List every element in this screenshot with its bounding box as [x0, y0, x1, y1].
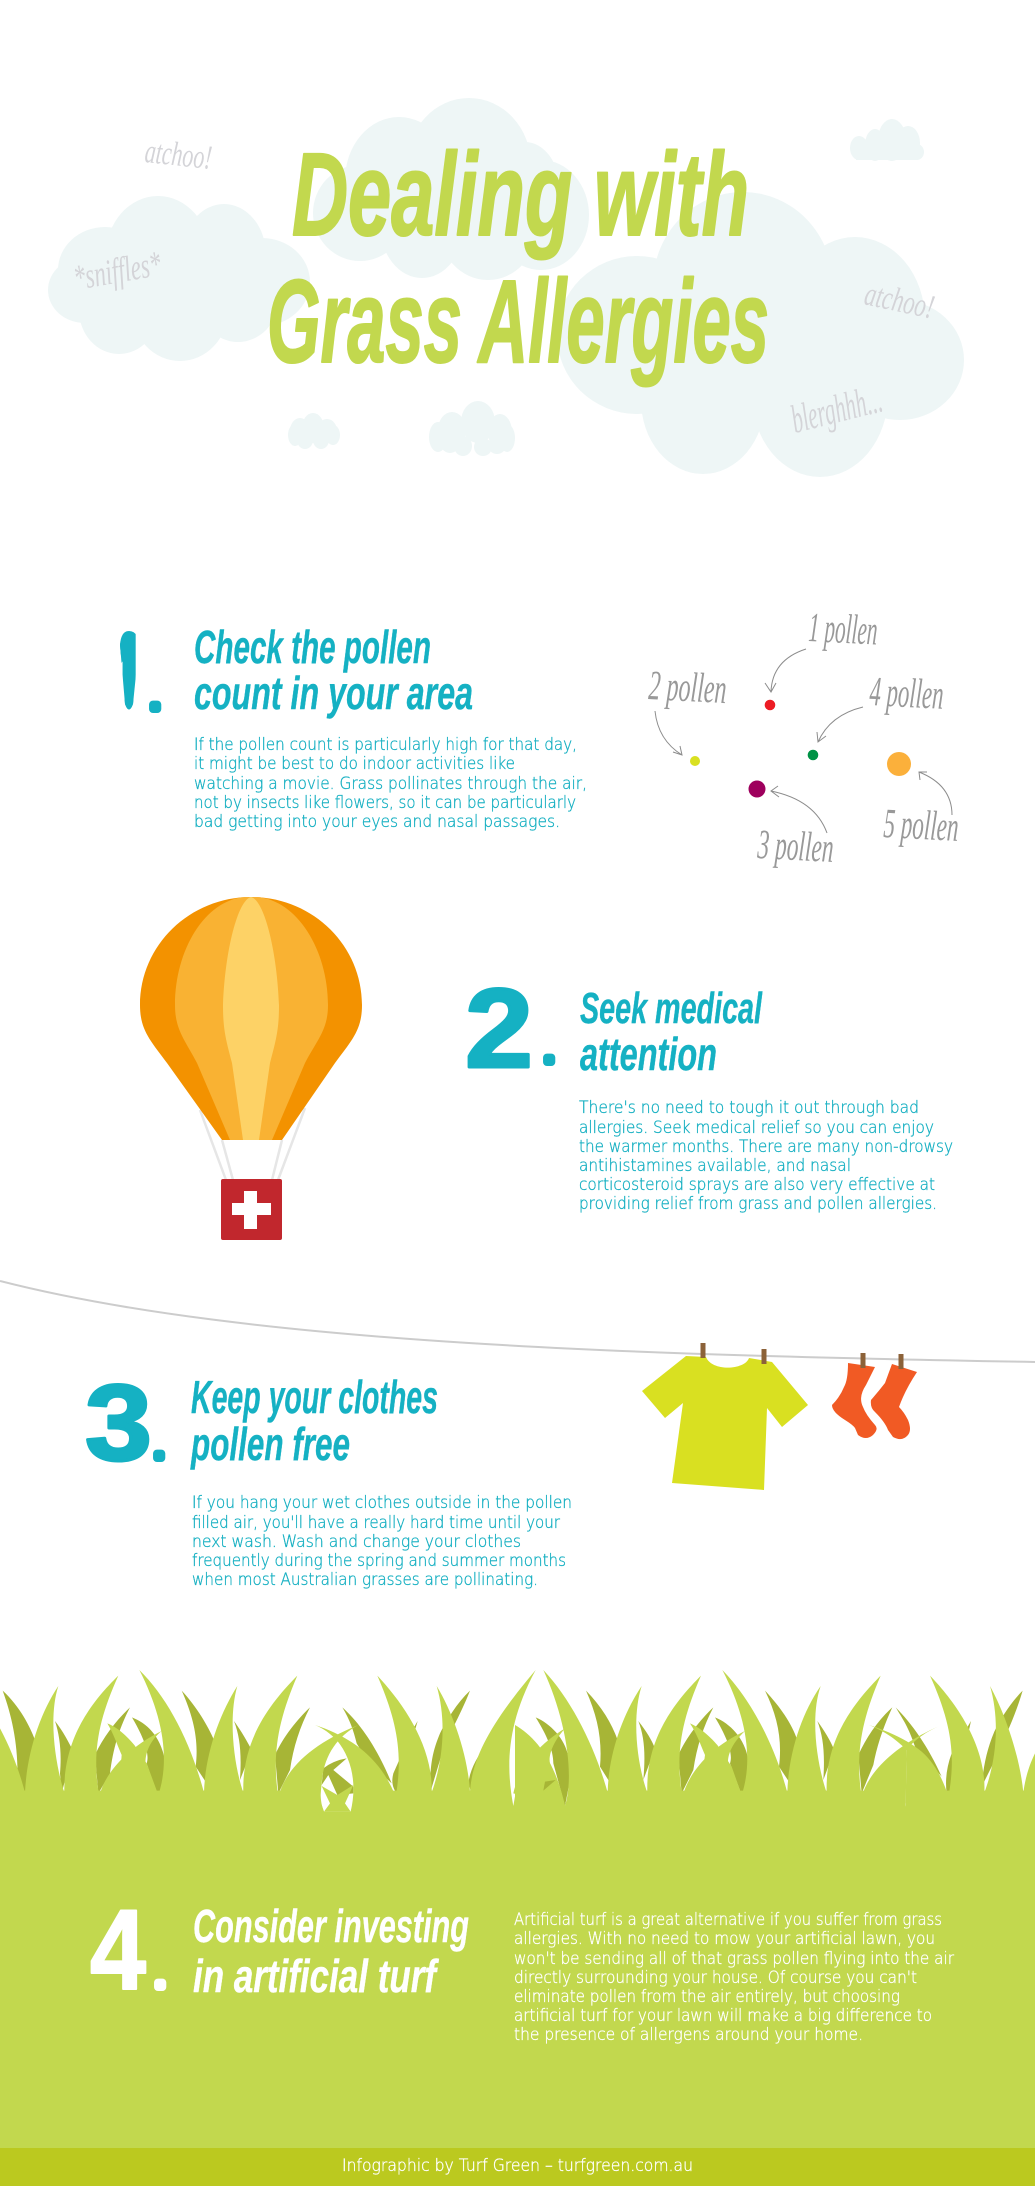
heading step 3: pollen free — [190, 1418, 350, 1470]
body text step 2: There's no need to tough it out through bad — [579, 1098, 919, 1118]
label: 2 pollen: 2 pollen — [647, 663, 728, 713]
body text step 1: watching a movie. Grass pollinates through the air, — [194, 774, 587, 794]
handwritten: sniffles: *sniffles* — [70, 243, 164, 298]
body text step 2: antihistamines available, and nasal — [579, 1156, 851, 1176]
heading step 4 — [193, 1900, 469, 2002]
heading step 3 — [190, 1371, 438, 1470]
number 3: 3 — [85, 1362, 152, 1483]
body text step 1: not by insects like flowers, so it can be particularly — [194, 793, 576, 813]
heading step 2: Seek medical — [580, 984, 762, 1033]
icon: clothes pegs — [703, 1343, 901, 1369]
number 4: . — [156, 1961, 164, 1994]
panel: header with clouds and title — [48, 98, 964, 477]
body text step 4: directly surrounding your house. Of course you can't — [514, 1968, 917, 1988]
cloud: top centre — [313, 98, 589, 280]
number 4: 4 — [90, 1887, 146, 2014]
body text step 1 — [194, 735, 587, 832]
body text step 2 — [579, 1098, 953, 1214]
body text step 1: bad getting into your eyes and nasal passages. — [194, 812, 560, 832]
number 1 — [120, 631, 162, 713]
body text step 3 — [192, 1493, 572, 1590]
heading step 4: in artificial turf — [193, 1950, 440, 2002]
cloud: large right — [557, 192, 964, 477]
panel: step 4 grass and artificial turf — [0, 1670, 1035, 2148]
panel: step 3 keep your clothes pollen free — [0, 1281, 1035, 1590]
body text step 4: allergies. With no need to mow your artificial lawn, you — [514, 1929, 935, 1949]
body text step 3: filled air, you'll have a really hard time until your — [192, 1513, 560, 1533]
body text step 2: providing relief from grass and pollen allergies. — [579, 1194, 937, 1214]
icon: t-shirt — [642, 1356, 808, 1490]
cloud: left — [48, 196, 310, 361]
body text step 4: the presence of allergens around your home. — [514, 2025, 863, 2045]
body text step 3: If you hang your wet clothes outside in the pollen — [192, 1493, 572, 1513]
heading step 2 — [580, 984, 762, 1080]
heading step 1: count in your area — [194, 667, 473, 719]
footer bar — [0, 2148, 1035, 2186]
cloud: small bottom left — [288, 413, 340, 449]
heading step 1: Check the pollen — [194, 621, 431, 673]
panel: step 2 seek medical attention — [140, 897, 953, 1240]
handwritten: atchoo left: atchoo! — [143, 133, 214, 177]
heading step 3: Keep your clothes — [191, 1371, 438, 1423]
title line 1: Dealing with — [292, 129, 749, 261]
heading step 2: attention — [580, 1028, 717, 1080]
number 1: . — [151, 683, 159, 716]
pollen dots — [690, 700, 911, 798]
footer credit: Infographic by Turf Green – turfgreen.com.au — [342, 2156, 693, 2176]
chart: pollen count dots — [647, 605, 960, 872]
arrows to dots — [655, 649, 952, 833]
icon: socks — [832, 1363, 917, 1439]
label: 4 pollen: 4 pollen — [868, 669, 945, 719]
panel: step 1 check the pollen count — [115, 605, 960, 872]
cloud: small top right — [850, 119, 924, 161]
body text step 2: corticosteroid sprays are also very effective at — [579, 1175, 935, 1195]
body text step 4: Artificial turf is a great alternative if you suffer from grass — [514, 1910, 942, 1930]
body text step 3: next wash. Wash and change your clothes — [192, 1532, 521, 1552]
clothesline — [0, 1281, 1035, 1362]
heading step 1 — [194, 621, 473, 719]
label: 1 pollen: 1 pollen — [807, 605, 879, 655]
body text step 4: artificial turf for your lawn will make a big difference to — [514, 2006, 932, 2026]
body text step 2: allergies. Seek medical relief so you can enjoy — [579, 1118, 934, 1138]
number 3: . — [155, 1432, 163, 1465]
label: 3 pollen: 3 pollen — [756, 822, 835, 872]
heading step 4: Consider investing — [193, 1900, 469, 1952]
cloud: small bottom centre — [429, 401, 515, 456]
body text step 3: frequently during the spring and summer months — [192, 1551, 566, 1571]
grass field — [0, 1670, 1035, 2148]
handwritten: atchoo right: atchoo! — [861, 276, 937, 326]
label: 5 pollen: 5 pollen — [882, 801, 960, 851]
body text step 1: If the pollen count is particularly high for that day, — [194, 735, 577, 755]
body text step 2: the warmer months. There are many non-drowsy — [579, 1137, 953, 1157]
number 2: 2 — [465, 966, 533, 1091]
handwritten: blerghhh: blerghhh... — [786, 376, 886, 442]
body text step 3: when most Australian grasses are pollinating. — [192, 1570, 538, 1590]
icon: medical hot air balloon — [140, 897, 362, 1240]
body text step 4: eliminate pollen from the air entirely, but choosing — [514, 1987, 900, 2007]
number 1: 1 — [115, 610, 141, 735]
number 2: . — [545, 1036, 553, 1069]
body text step 1: it might be best to do indoor activities like — [194, 754, 515, 774]
body text step 4 — [514, 1910, 954, 2045]
body text step 4: won't be sending all of that grass pollen flying into the air — [514, 1949, 954, 1969]
